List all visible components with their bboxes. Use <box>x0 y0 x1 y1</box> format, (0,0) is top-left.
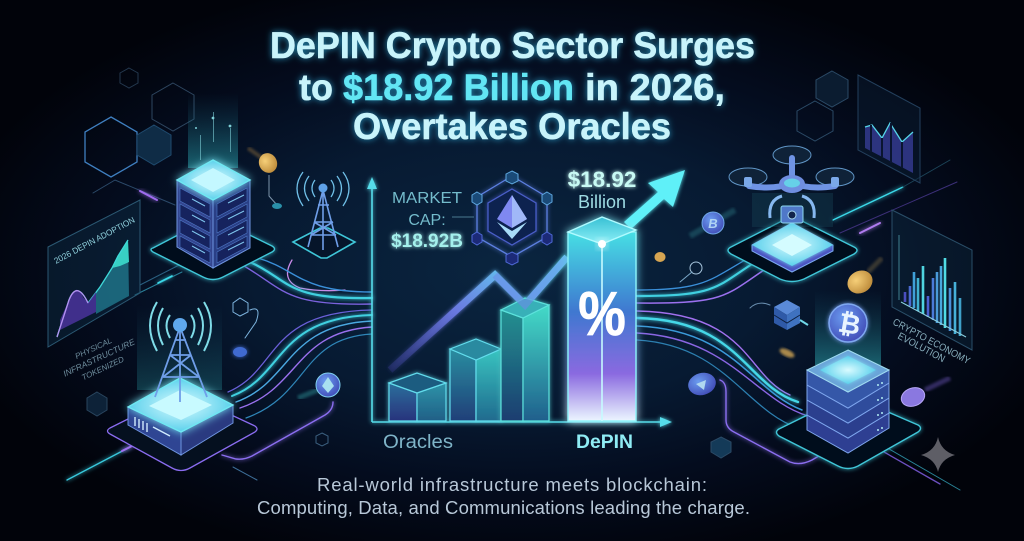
callout: $18.92 billion: Billion <box>578 192 626 212</box>
axis label: DePIN: DePIN <box>576 432 633 453</box>
axes <box>367 177 672 427</box>
subtitle: Real-world infrastructure meets blockchain: <box>317 474 707 495</box>
callout: market cap <box>391 190 463 252</box>
decorative hexagons right <box>711 71 848 458</box>
percent sign: % <box>578 279 626 349</box>
icon: small bitcoin coin <box>690 210 735 236</box>
panel heading: 2026 DEPIN ADOPTION <box>52 215 136 266</box>
icon: server rack left <box>151 93 274 280</box>
axis label: Oracles: Oracles <box>383 432 453 453</box>
data streams right <box>637 260 808 428</box>
title: DePIN Crypto Sector Surges <box>270 25 755 66</box>
icon: bitcoin coin <box>829 304 867 342</box>
callout: market cap: MARKET <box>392 190 462 207</box>
icon: bitcoin coin: ₿ <box>836 307 863 341</box>
panel label: EVOLUTION <box>896 331 947 365</box>
icon: small antenna tower <box>293 172 355 258</box>
bar: oracles <box>389 373 446 421</box>
icon: link node <box>233 347 247 357</box>
growth arrow <box>390 170 685 370</box>
chart: market growth bars <box>367 170 685 453</box>
icon: large antenna tower <box>108 302 257 470</box>
panel: crypto economy evolution <box>891 210 972 367</box>
panel label: CRYPTO ECONOMY <box>891 317 972 367</box>
bar: DePIN <box>568 217 636 421</box>
label: physical infrastructure tokenized <box>57 327 141 389</box>
label: physical infrastructure tokenized: TOKENIZED <box>80 355 126 382</box>
title: in 2026, <box>585 67 725 108</box>
icon: gold coin right <box>843 258 882 298</box>
icon: gold coin top left <box>248 148 282 209</box>
title <box>270 25 755 147</box>
callout: $18.92 billion: $18.92 <box>568 167 636 192</box>
data streams left <box>228 258 372 418</box>
callout: market cap: CAP: <box>408 212 446 229</box>
label: physical infrastructure tokenized: INFRASTRUCTURE <box>61 336 137 379</box>
panel: upper right line chart <box>858 75 920 183</box>
icon: ethereum coin right <box>686 370 718 398</box>
bar: third <box>501 298 549 421</box>
icon: small bitcoin coin: B <box>708 216 718 231</box>
decorative hexagons left <box>85 68 328 446</box>
title: Overtakes Oracles <box>353 106 671 147</box>
subtitle: Computing, Data, and Communications leading the charge. <box>257 497 750 518</box>
icon: gold spark <box>778 346 796 360</box>
icon: sparkle watermark <box>921 437 955 472</box>
title: $18.92 Billion <box>343 67 574 108</box>
icon: ethereum coin left <box>298 373 340 398</box>
bar: second <box>450 339 501 421</box>
icon: ethereum hexagon <box>452 171 552 265</box>
panel: 2026 DePIN adoption chart <box>48 200 140 347</box>
callout: market cap: $18.92B <box>391 231 463 252</box>
area chart <box>57 240 129 337</box>
icon: purple coin <box>899 378 950 410</box>
icon: small gold coin centre <box>654 252 666 262</box>
callout: $18.92 billion <box>568 167 636 212</box>
icon: drone on platform <box>728 146 857 282</box>
circuit lines right <box>680 160 960 490</box>
subtitle <box>257 474 750 518</box>
circuit and diagonal lines left <box>67 180 345 480</box>
icon: block cube <box>774 300 808 330</box>
bar chart <box>905 258 960 336</box>
title: to <box>299 67 333 108</box>
label: physical infrastructure tokenized: PHYSICAL <box>74 336 113 361</box>
icon: server stack right <box>776 290 920 468</box>
